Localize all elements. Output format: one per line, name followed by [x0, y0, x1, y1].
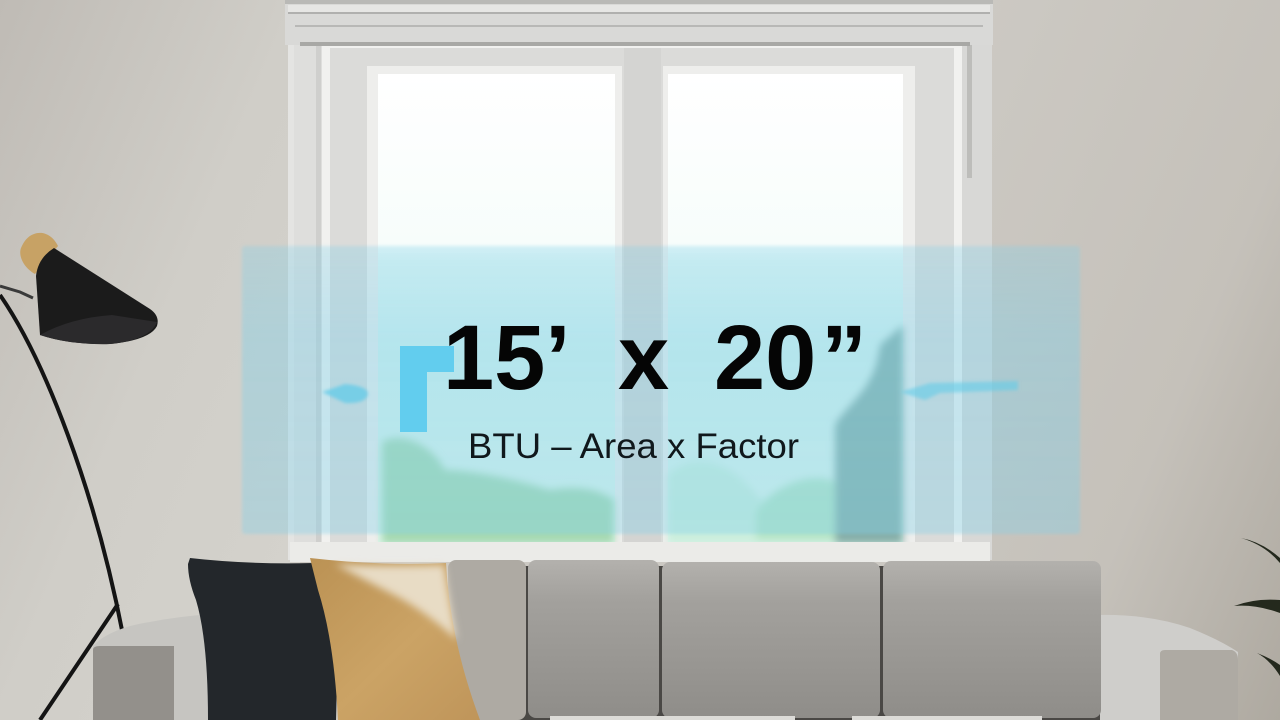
blind cord	[967, 45, 972, 178]
right sash and glass	[663, 66, 915, 546]
sofa back shadow	[450, 566, 1100, 720]
window side trim	[288, 30, 992, 560]
lamp shade opening	[40, 315, 157, 344]
main dimension text: 20	[714, 307, 816, 409]
left dimension arrow	[322, 384, 368, 403]
floor lamp	[0, 233, 158, 720]
landscape: hills and trees	[382, 325, 903, 544]
right arm	[1098, 615, 1238, 720]
blue corner marker	[400, 346, 454, 432]
main dimension text: ’	[545, 307, 571, 409]
plant leaves	[1234, 538, 1280, 676]
tan pillow	[310, 558, 480, 720]
lamp cap	[20, 233, 58, 274]
centre mullion	[624, 48, 661, 548]
main dimension text: ”	[821, 307, 867, 409]
lamp bracket	[0, 286, 33, 298]
cornice	[285, 0, 993, 46]
sofa	[93, 558, 1238, 720]
window inner frame	[322, 45, 962, 550]
lamp base leg	[40, 604, 118, 720]
window	[285, 0, 993, 562]
seat edge	[550, 716, 1042, 720]
right dimension arrow	[900, 381, 1018, 400]
lamp shade	[36, 248, 158, 344]
main dimension text: 15	[443, 307, 545, 409]
left arm	[93, 614, 215, 720]
dark pillow	[188, 558, 340, 720]
blue translucent overlay panel	[242, 246, 1080, 534]
lamp arm	[0, 295, 123, 635]
left sash and glass	[367, 66, 622, 546]
tan pillow highlight	[335, 564, 457, 640]
window sill	[290, 542, 990, 562]
back cushions	[448, 560, 1101, 720]
main dimension text: x	[618, 307, 669, 409]
formula text: BTU – Area x Factor	[468, 427, 799, 466]
